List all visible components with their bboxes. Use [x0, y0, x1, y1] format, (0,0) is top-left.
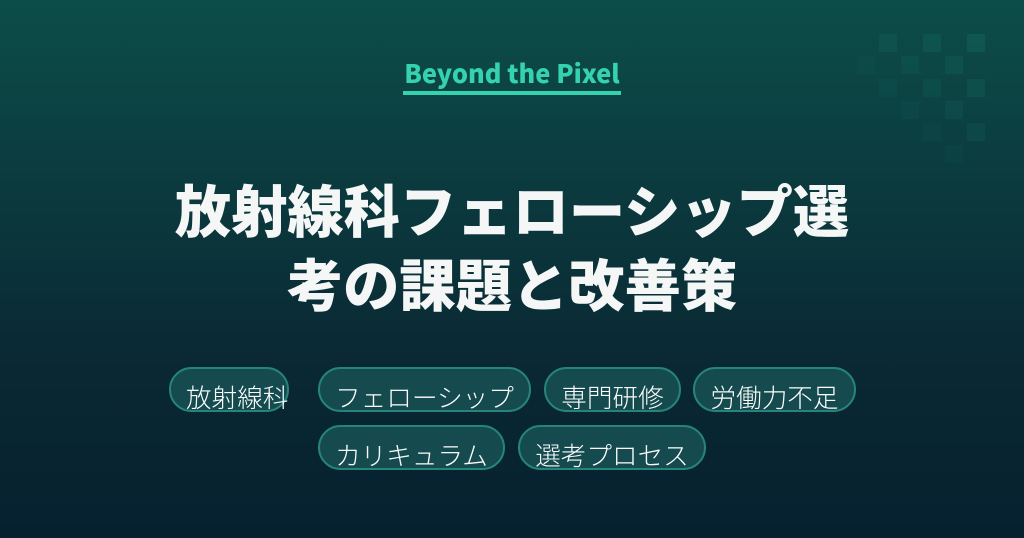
tag: カリキュラム — [318, 425, 505, 470]
tag: フェローシップ: フェローシップ — [335, 378, 514, 415]
tag: フェローシップ — [318, 367, 531, 412]
tag: カリキュラム: カリキュラム — [335, 436, 488, 473]
tag: 選考プロセス: 選考プロセス — [535, 436, 689, 473]
title — [175, 168, 849, 323]
tag: 専門研修: 専門研修 — [561, 378, 664, 415]
tag list — [169, 367, 856, 473]
tag: 労働力不足: 労働力不足 — [710, 378, 838, 415]
title: 考の課題と改善策 — [287, 242, 737, 323]
tag: 労働力不足 — [693, 367, 856, 412]
title: 放射線科フェローシップ選 — [175, 168, 849, 249]
tag: 選考プロセス — [518, 425, 706, 470]
brand label: Beyond the Pixel — [404, 55, 620, 91]
tag: 専門研修 — [544, 367, 681, 412]
tag: 放射線科: 放射線科 — [186, 378, 288, 415]
decorative pixel grid — [879, 34, 985, 97]
tag: 放射線科 — [169, 367, 289, 412]
